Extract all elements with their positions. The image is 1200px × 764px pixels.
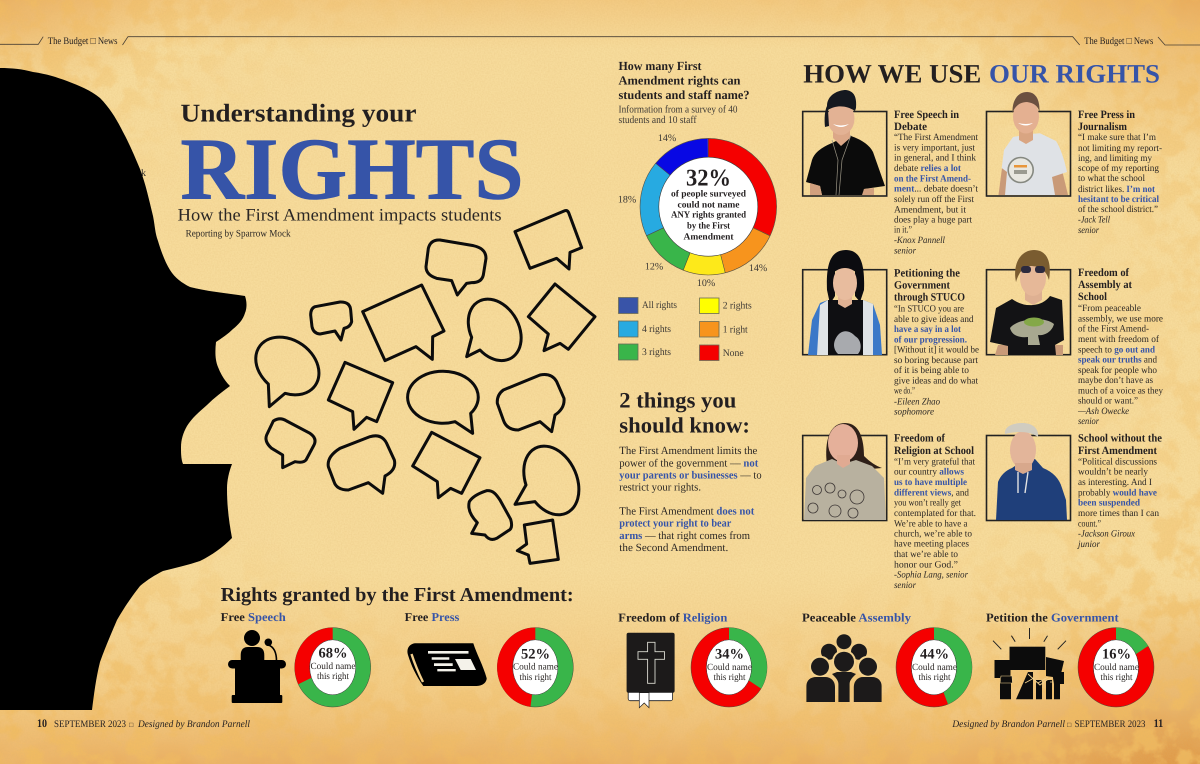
quote text: contemplated for that.	[894, 508, 976, 519]
donut: 68%: Could name	[310, 662, 356, 672]
quote text: honor our God.”	[894, 559, 958, 570]
topic heading: Debate	[894, 121, 927, 133]
quote text: we do.”	[894, 386, 915, 397]
donut chart	[640, 138, 777, 275]
footer: right page	[951, 718, 1163, 730]
heading: Understanding your RIGHTS	[178, 99, 524, 240]
chart subheading: Information from a survey of 40	[618, 105, 738, 116]
quote text: speak our truths and	[1078, 355, 1157, 366]
donut centre text	[671, 166, 747, 242]
quote text: -Jack Tell	[1078, 215, 1110, 226]
quote text: you won’t really get	[894, 498, 961, 509]
quote text: —Ash Owecke	[1077, 406, 1130, 417]
quote text: church, we’re able to	[894, 528, 972, 539]
quote text: “In STUCO you are	[894, 304, 964, 315]
footer: right page: Designed by Brandon Parnell	[951, 719, 1065, 730]
donut: 16%: this right	[1100, 673, 1133, 683]
quote text: different views, and	[894, 487, 969, 498]
topic heading: Free Press in	[1078, 109, 1136, 121]
donut: 68%: this right	[317, 672, 349, 682]
quote text: ing, and limiting my	[1078, 153, 1152, 164]
section heading: should know:	[619, 413, 750, 438]
quote text: does play a huge part	[894, 215, 972, 226]
quote text: that we’re able to	[894, 549, 958, 560]
panel: quote, Petitioning the Government	[803, 250, 979, 418]
heading: HOW WE USE OUR RIGHTS: HOW WE USE	[803, 58, 981, 88]
quote text: of it is being able to	[894, 365, 969, 376]
right: Freedom of Religion	[618, 610, 767, 708]
quote text: been suspended	[1078, 498, 1141, 509]
quote text: is very important, just	[894, 142, 975, 153]
topic heading: Free Speech in	[894, 109, 960, 121]
quote text: junior	[1076, 539, 1100, 550]
quote text: scope of my reporting	[1078, 163, 1159, 174]
quote text: We’re able to have a	[894, 518, 968, 529]
topic heading: Religion at School	[894, 445, 974, 457]
topic heading	[1078, 109, 1136, 133]
donut: 52%: 52%	[521, 646, 550, 662]
photo: Jackson Giroux	[986, 423, 1070, 520]
label: Freedom of Religion	[618, 610, 728, 624]
donut: 16%	[1078, 628, 1154, 707]
donut percentage labels: 10%	[697, 278, 715, 289]
quote text: maybe don’t have as	[1078, 375, 1153, 386]
chart heading: How many First	[618, 59, 702, 73]
donut percentage labels: 12%	[645, 261, 663, 272]
donut: 34%: Could name	[707, 663, 752, 673]
topic heading: First Amendment	[1078, 445, 1157, 457]
icon: newspaper	[407, 643, 487, 686]
quote text	[894, 132, 978, 256]
donut centre text: of people surveyed	[671, 190, 747, 200]
quote text: hesitant to be critical	[1078, 194, 1159, 205]
chart heading: Amendment rights can	[618, 73, 741, 87]
photo: Ash Owecke	[986, 250, 1070, 355]
quote text: of the First Amend-	[1078, 324, 1149, 335]
running header	[0, 36, 1200, 47]
chart subheading	[618, 105, 738, 126]
quote text	[1077, 303, 1163, 427]
paragraph 1	[619, 445, 762, 493]
footer: left page: □	[129, 721, 134, 729]
quote text: give ideas and do what	[894, 376, 978, 387]
section heading: Rights granted by the First Amendment:	[221, 584, 574, 606]
photo: Jack Tell	[986, 92, 1070, 196]
quote text	[894, 304, 979, 418]
quote text: -Jackson Giroux	[1078, 529, 1136, 540]
quote text: much of a voice as they	[1078, 385, 1163, 396]
icon: group of people	[806, 634, 882, 702]
running header: The Budget □ News	[48, 36, 118, 47]
donut: 34%	[691, 628, 767, 707]
donut percentage labels	[618, 133, 767, 289]
quote text: in it.”	[894, 225, 912, 236]
topic heading	[894, 268, 965, 304]
quote text: senior	[1078, 225, 1099, 236]
quote text: Amendment, but it	[894, 204, 966, 215]
topic heading: School	[1078, 291, 1107, 303]
quote text: count.”	[1078, 518, 1101, 529]
quote text: have a say in a lot	[894, 324, 962, 335]
big word RIGHTS: RIGHTS	[180, 122, 524, 218]
paragraph 1: power of the government — not	[619, 457, 759, 469]
donut centre text: by the First	[687, 221, 731, 231]
label: Peaceable Assembly	[802, 610, 911, 624]
chart legend: None	[723, 348, 744, 359]
footer: right page: SEPTEMBER 2023	[1075, 719, 1145, 730]
panel: 2 things you should know	[619, 388, 762, 554]
paragraph 2: The First Amendment does not	[619, 506, 755, 518]
chart legend: 4 rights	[642, 324, 671, 335]
heading: HOW WE USE OUR RIGHTS	[803, 58, 1160, 88]
donut centre text: Amendment	[684, 232, 734, 242]
quote text: of the school district.”	[1078, 204, 1158, 215]
quote text: our country allows	[894, 467, 964, 478]
donut: 52%: Could name	[513, 663, 558, 673]
title line: Understanding your	[180, 99, 416, 128]
quote text: have meeting places	[894, 539, 969, 550]
footer: left page	[37, 718, 250, 730]
footer: left page: Designed by Brandon Parnell	[137, 719, 250, 730]
chart subheading: students and 10 staff	[618, 115, 697, 126]
quote text: “From peaceable	[1078, 303, 1141, 314]
right: Petition the Government	[986, 610, 1154, 707]
chart legend: 3 rights	[642, 347, 671, 358]
icon: bible	[627, 633, 675, 708]
donut: 52%: this right	[520, 673, 552, 683]
donut: 68%: 68%	[318, 646, 348, 662]
donut percentage labels: 18%	[618, 195, 636, 206]
chart heading	[618, 59, 750, 102]
donut: 34%: 34%	[715, 646, 744, 662]
right: Free Speech	[221, 610, 371, 707]
topic heading: Freedom of	[1078, 267, 1129, 279]
quote text: to what the school	[1078, 173, 1145, 184]
quote text: should or want.”	[1078, 396, 1138, 407]
quote text: probably would have	[1078, 487, 1158, 498]
heading: HOW WE USE OUR RIGHTS: OUR RIGHTS	[989, 58, 1160, 88]
quote text	[1078, 132, 1162, 236]
footer: left page: SEPTEMBER 2023	[54, 719, 126, 730]
quote text: sophomore	[894, 407, 935, 418]
silhouette: head in profile	[0, 68, 246, 710]
panel: quote, Free Speech in Debate	[803, 90, 978, 256]
photo: Sophia Lang	[803, 423, 887, 520]
topic heading	[1078, 433, 1162, 457]
quote text: on the First Amend-	[894, 173, 971, 184]
donut: 44%: Could name	[912, 663, 957, 673]
chart legend: 2 rights	[723, 301, 752, 312]
photo: Eileen Zhao	[803, 250, 887, 355]
label: Petition the Government	[986, 610, 1119, 624]
quote text: not limiting my report-	[1078, 143, 1162, 154]
hidden byline remnant behind silhouette: Sparrow Mock	[86, 168, 146, 179]
section heading	[619, 388, 750, 438]
paragraph 2: protect your right to bear	[619, 518, 731, 530]
donut: 16%: Could name	[1094, 663, 1139, 673]
donut percentage labels: 14%	[658, 133, 676, 144]
byline: Reporting by Sparrow Mock	[186, 229, 291, 240]
donut: 16%: 16%	[1102, 646, 1131, 662]
quote text: ment with freedom of	[1078, 334, 1160, 345]
chart legend: All rights	[642, 300, 677, 311]
donut centre text: could not name	[678, 200, 740, 210]
topic heading	[894, 433, 974, 457]
paragraph 2: arms — that right comes from	[619, 530, 750, 542]
section heading: 2 things you	[619, 388, 736, 413]
chart legend: 1 right	[723, 325, 748, 336]
running header: The Budget □ News	[1084, 36, 1153, 47]
quote text: more times than I can	[1078, 508, 1159, 519]
topic heading: through STUCO	[894, 292, 965, 304]
topic heading: Assembly at	[1078, 279, 1132, 291]
quote text: -Knox Pannell	[894, 235, 945, 246]
paragraph 1: The First Amendment limits the	[619, 445, 757, 457]
right: Peaceable Assembly	[802, 610, 972, 707]
chart heading: students and staff name?	[618, 88, 750, 102]
quote text: so boring because part	[894, 355, 978, 366]
donut percentage labels: 14%	[749, 263, 767, 274]
donut: 44%: this right	[918, 673, 951, 683]
quote text: -Eileen Zhao	[894, 396, 940, 407]
quote text: senior	[1078, 416, 1099, 427]
quote text: solely run off the First	[894, 194, 974, 205]
quote text: “I’m very grateful that	[894, 456, 975, 467]
paragraph 1: restrict your rights.	[619, 481, 701, 493]
quote text: assembly, we use more	[1078, 313, 1163, 324]
quote text: in general, and I think	[894, 153, 976, 164]
label: Free Speech	[221, 610, 286, 624]
panel: rights granted by the First Amendment	[221, 584, 1154, 708]
paragraph 2	[619, 506, 755, 554]
quote text: ment... debate doesn’t	[894, 183, 978, 194]
label: Free Press	[405, 610, 460, 624]
footer: left page: 10	[37, 718, 47, 730]
footer: right page: □	[1067, 721, 1072, 729]
quote text: as interesting. And I	[1078, 477, 1152, 488]
quote text: “I make sure that I’m	[1078, 132, 1157, 143]
quote text: district likes. I’m not	[1078, 184, 1156, 195]
panel: survey chart	[618, 59, 777, 360]
donut centre text: ANY rights granted	[671, 211, 747, 221]
quote text: of our progression.	[894, 334, 967, 345]
topic heading: Government	[894, 280, 950, 292]
donut: 68%	[295, 628, 371, 707]
topic heading	[1078, 267, 1132, 303]
topic heading: School without the	[1078, 433, 1162, 445]
quote text: -Sophia Lang, senior	[894, 570, 968, 581]
donut centre text: 32%	[686, 166, 731, 192]
quote text: senior	[894, 245, 916, 256]
panel: quote, Free Press in Journalism	[986, 92, 1162, 236]
topic heading: Journalism	[1078, 121, 1128, 133]
donut: 52%	[497, 628, 573, 707]
quote text: wouldn’t be nearly	[1078, 467, 1148, 478]
quote text: “Political discussions	[1078, 456, 1157, 467]
quote text: speak for people who	[1078, 365, 1157, 376]
paragraph 1: your parents or businesses — to	[619, 470, 762, 482]
subtitle: How the First Amendment impacts students	[178, 205, 502, 225]
topic heading	[894, 109, 960, 133]
donut: 44%	[896, 628, 972, 707]
icon: podium	[228, 630, 286, 703]
quote text	[1076, 456, 1159, 550]
icon: speech bubbles	[256, 211, 595, 563]
quote text: speech to go out and	[1078, 344, 1156, 355]
right: Free Press	[405, 610, 573, 707]
photo: Knox Pannell	[803, 90, 887, 196]
icon: protest signs	[993, 628, 1066, 699]
quote text: senior	[894, 580, 916, 591]
quote text: able to give ideas and	[894, 314, 974, 325]
panel: quote, School without the First Amendment	[986, 423, 1162, 550]
quote text: debate relies a lot	[894, 163, 962, 174]
panel: quote, Freedom of Assembly	[986, 250, 1163, 427]
chart legend	[618, 298, 752, 360]
donut: 44%: 44%	[920, 646, 949, 662]
quote text: [Without it] it would be	[894, 345, 979, 356]
panel: quote, Freedom of Religion	[803, 423, 976, 591]
paragraph 2: the Second Amendment.	[619, 542, 729, 554]
quote text: “The First Amendment	[894, 132, 978, 143]
quote text	[894, 456, 976, 591]
footer: right page: 11	[1154, 718, 1163, 730]
quote text: us to have multiple	[894, 477, 968, 488]
topic heading: Petitioning the	[894, 268, 960, 280]
topic heading: Freedom of	[894, 433, 945, 445]
donut: 34%: this right	[714, 673, 746, 683]
